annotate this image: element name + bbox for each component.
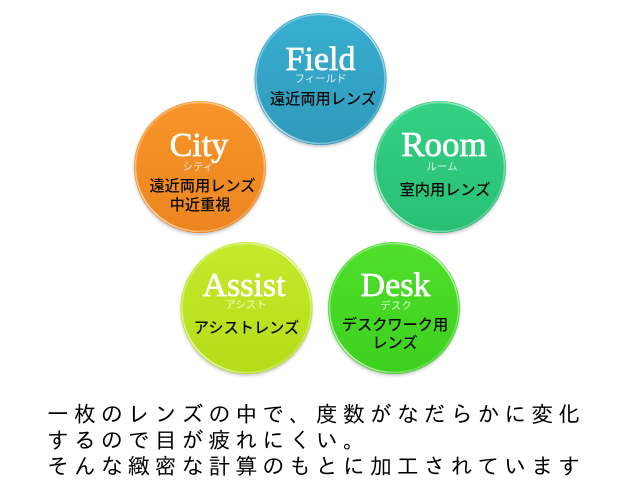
label: Room: Room [401,125,487,164]
label: 遠近両用レンズ: 遠近両用レンズ [270,90,376,108]
label: 遠近両用レンズ 中近重視 [149,177,256,214]
label: Desk: Desk [361,267,430,304]
circle: Desk [328,242,460,376]
label: 遠近両用レンズ 中近重視: 遠近両用レンズ [149,177,256,195]
label: アシスト: アシスト [225,297,267,312]
text block: description: そんな緻密な計算のもとに加工されています [47,455,585,477]
label: Field: Field [286,41,355,78]
label: アシストレンズ: アシストレンズ [194,319,299,337]
text block: description: 一枚のレンズの中で、度数がなだらかに変化 [47,403,585,425]
circle: Room [374,101,506,234]
label: デスクワーク用 レンズ: レンズ [372,334,418,352]
label: デスク: デスク [380,298,412,313]
text block: description [47,403,585,477]
label: フィールド: フィールド [294,71,347,86]
label: デスクワーク用 レンズ [342,316,448,352]
label: City: City [170,127,228,164]
label: Assist: Assist [202,267,286,304]
label: 遠近両用レンズ 中近重視: 中近重視 [170,197,230,214]
circle: Assist [180,242,312,376]
circle: City [134,101,266,234]
label: ルーム: ルーム [426,159,458,174]
circle: Field [254,13,386,146]
label: シティ: シティ [183,159,213,174]
label: 室内用レンズ: 室内用レンズ [400,181,490,199]
label: デスクワーク用 レンズ: デスクワーク用 [342,316,448,334]
text block: description: するので目が疲れにくい。 [47,429,370,451]
